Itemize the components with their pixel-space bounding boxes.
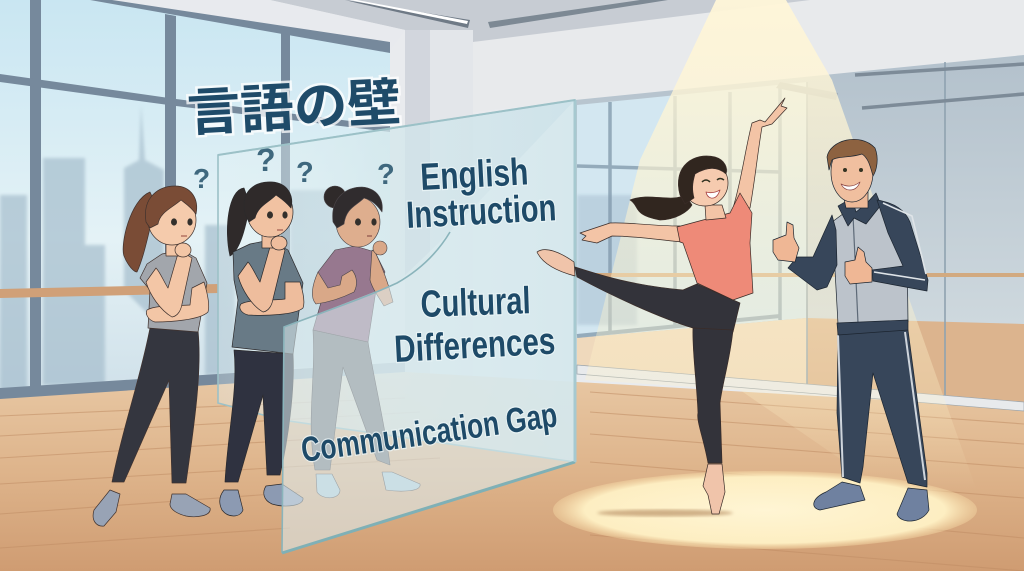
label: Communication Gap: Communication Gap	[299, 395, 560, 470]
viewer-right sleeve	[872, 200, 928, 291]
ponytail	[123, 192, 156, 272]
head	[842, 190, 868, 208]
shirt	[677, 193, 753, 300]
front glass pane	[218, 100, 575, 553]
student 2	[220, 182, 304, 516]
raised arm	[146, 250, 192, 317]
ballerina	[537, 98, 787, 514]
question marks: ?	[256, 142, 276, 178]
zipper	[853, 215, 858, 323]
pointe shoe standing	[703, 464, 725, 514]
jacket body	[828, 205, 908, 324]
raised leg and hips	[575, 267, 740, 332]
spotlight beam	[585, 0, 980, 500]
mirror wall	[575, 55, 1024, 411]
ceiling lights	[345, 0, 838, 100]
ponytail	[630, 195, 692, 220]
sneakers	[814, 482, 865, 510]
question marks: ?	[193, 163, 210, 194]
shoes	[93, 490, 120, 526]
thumbs up hand 1	[773, 222, 799, 262]
leggings	[112, 328, 199, 483]
floor	[0, 372, 1024, 571]
city skyline	[0, 105, 350, 390]
pointe shoe raised	[537, 250, 575, 276]
dancer floor shadow	[597, 510, 733, 516]
question marks: ?	[296, 157, 314, 189]
student 1	[93, 186, 210, 526]
label: English Instruction	[405, 151, 557, 237]
label: Cultural Differences: Differences	[393, 321, 556, 371]
waist band	[837, 320, 908, 335]
label: Cultural Differences: Cultural	[420, 280, 531, 326]
title: 言語の壁	[186, 74, 402, 143]
label: English Instruction: Instruction	[405, 187, 557, 237]
windows	[0, 0, 405, 399]
side arm	[580, 223, 682, 243]
window frames	[0, 0, 405, 399]
viewer-left sleeve	[788, 215, 837, 290]
label: English Instruction: English	[419, 151, 529, 199]
collar	[838, 193, 881, 226]
head	[166, 240, 182, 256]
question marks: ?	[377, 159, 395, 191]
floor spotlight pool	[553, 471, 977, 549]
barre	[0, 284, 218, 298]
label: Cultural Differences	[393, 280, 556, 371]
head	[705, 205, 726, 220]
raised arm	[733, 98, 787, 208]
shirt	[140, 250, 207, 332]
standing leg	[693, 328, 733, 463]
back glass pane	[218, 100, 575, 462]
question marks	[193, 142, 395, 194]
instructor	[773, 139, 929, 521]
lower arm	[146, 282, 209, 322]
student 3	[311, 186, 420, 498]
trousers	[837, 330, 927, 487]
thumbs up hand 2	[845, 247, 872, 284]
